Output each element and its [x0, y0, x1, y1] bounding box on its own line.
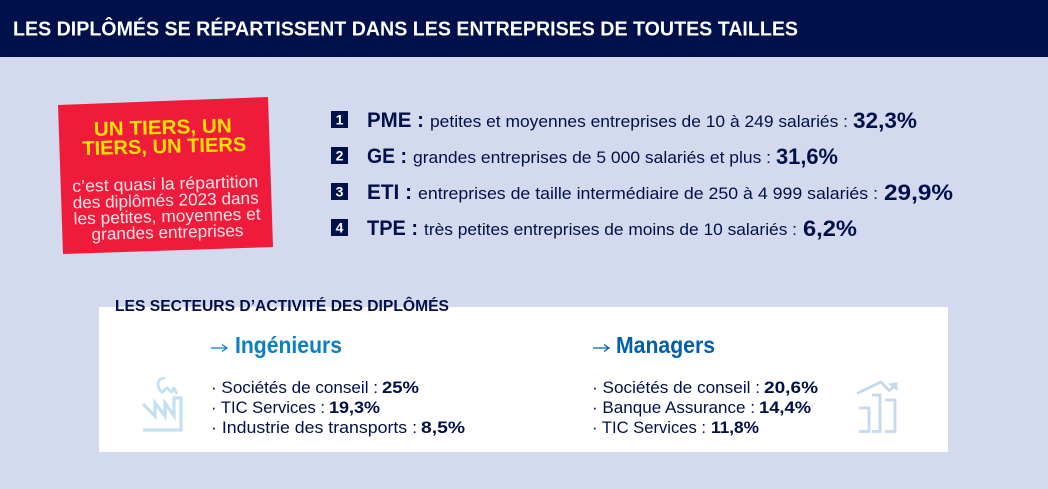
callout text [72, 172, 261, 244]
item 3: ETI: entreprises de taille intermédiaire de 250 à 4 999 salariés : [418, 184, 878, 203]
callout heading: UN TIERS, UN [94, 115, 232, 141]
icon: factory [143, 378, 181, 430]
ingenieurs column [211, 332, 465, 437]
list: managers sectors: · Sociétés de conseil : [592, 378, 760, 397]
item 3: ETI: ETI : [367, 181, 412, 204]
list: managers sectors [592, 378, 818, 437]
callout text: c’est quasi la répartition [72, 172, 258, 196]
callout text: les petites, moyennes et [73, 205, 261, 228]
title: LES DIPLÔMÉS SE RÉPARTISSENT DANS LES ENTREPRISES DE TOUTES TAILLES [13, 16, 798, 40]
item 1: PME: PME : [367, 109, 424, 132]
list: managers sectors: · TIC Services : [592, 418, 706, 437]
arrow: managers [593, 344, 609, 352]
item 3: ETI [331, 180, 953, 205]
item 1: PME: petites et moyennes entreprises de 10 à 249 salariés : [430, 112, 848, 131]
list: ingenieurs sectors: 19,3% [329, 398, 380, 417]
list: ingenieurs sectors: · Industrie des transports : [211, 418, 417, 437]
arrow: ingenieurs [211, 344, 227, 352]
managers column [592, 332, 818, 437]
heading: ingenieurs: Ingénieurs [235, 332, 342, 358]
callout: un tiers [58, 97, 273, 254]
item 2: GE: 31,6% [776, 144, 838, 169]
list: ingenieurs sectors: · TIC Services : [211, 398, 325, 417]
item 1: PME [331, 108, 917, 133]
item 2: GE: grandes entreprises de 5 000 salariés et plus : [413, 148, 771, 167]
callout text: grandes entreprises [91, 221, 244, 244]
item 4: TPE: 6,2% [803, 216, 857, 241]
item 2: GE: GE : [367, 145, 407, 168]
item 4: TPE: très petites entreprises de moins de 10 salariés : [424, 220, 797, 239]
sectors heading: LES SECTEURS D’ACTIVITÉ DES DIPLÔMÉS [115, 296, 449, 315]
list: ingenieurs sectors: 25% [382, 378, 419, 397]
item 1: PME: 1 [336, 112, 344, 128]
item 3: ETI: 3 [336, 184, 344, 200]
list: ingenieurs sectors: 8,5% [421, 418, 465, 437]
list: ingenieurs sectors [211, 378, 465, 437]
list: company sizes [331, 108, 953, 241]
item 2: GE [331, 144, 838, 169]
list: managers sectors: 14,4% [759, 398, 811, 417]
list: ingenieurs sectors: · Sociétés de conseil : [211, 378, 378, 397]
item 3: ETI: 29,9% [884, 180, 953, 205]
item 2: GE: 2 [336, 148, 344, 164]
header band [0, 0, 1048, 57]
icon: growth chart [857, 382, 897, 432]
item 4: TPE: TPE : [367, 217, 418, 240]
item 1: PME: 32,3% [853, 108, 917, 133]
callout text: des diplômés 2023 dans [72, 189, 259, 212]
list: managers sectors: 11,8% [711, 418, 759, 437]
list: managers sectors: · Banque Assurance : [592, 398, 755, 417]
item 4: TPE [331, 216, 857, 241]
panel: sectors [99, 296, 948, 452]
callout heading: TIERS, UN TIERS [82, 134, 247, 160]
list: managers sectors: 20,6% [764, 378, 818, 397]
heading: managers: Managers [616, 332, 715, 358]
item 4: TPE: 4 [336, 220, 344, 236]
callout heading [82, 115, 247, 160]
